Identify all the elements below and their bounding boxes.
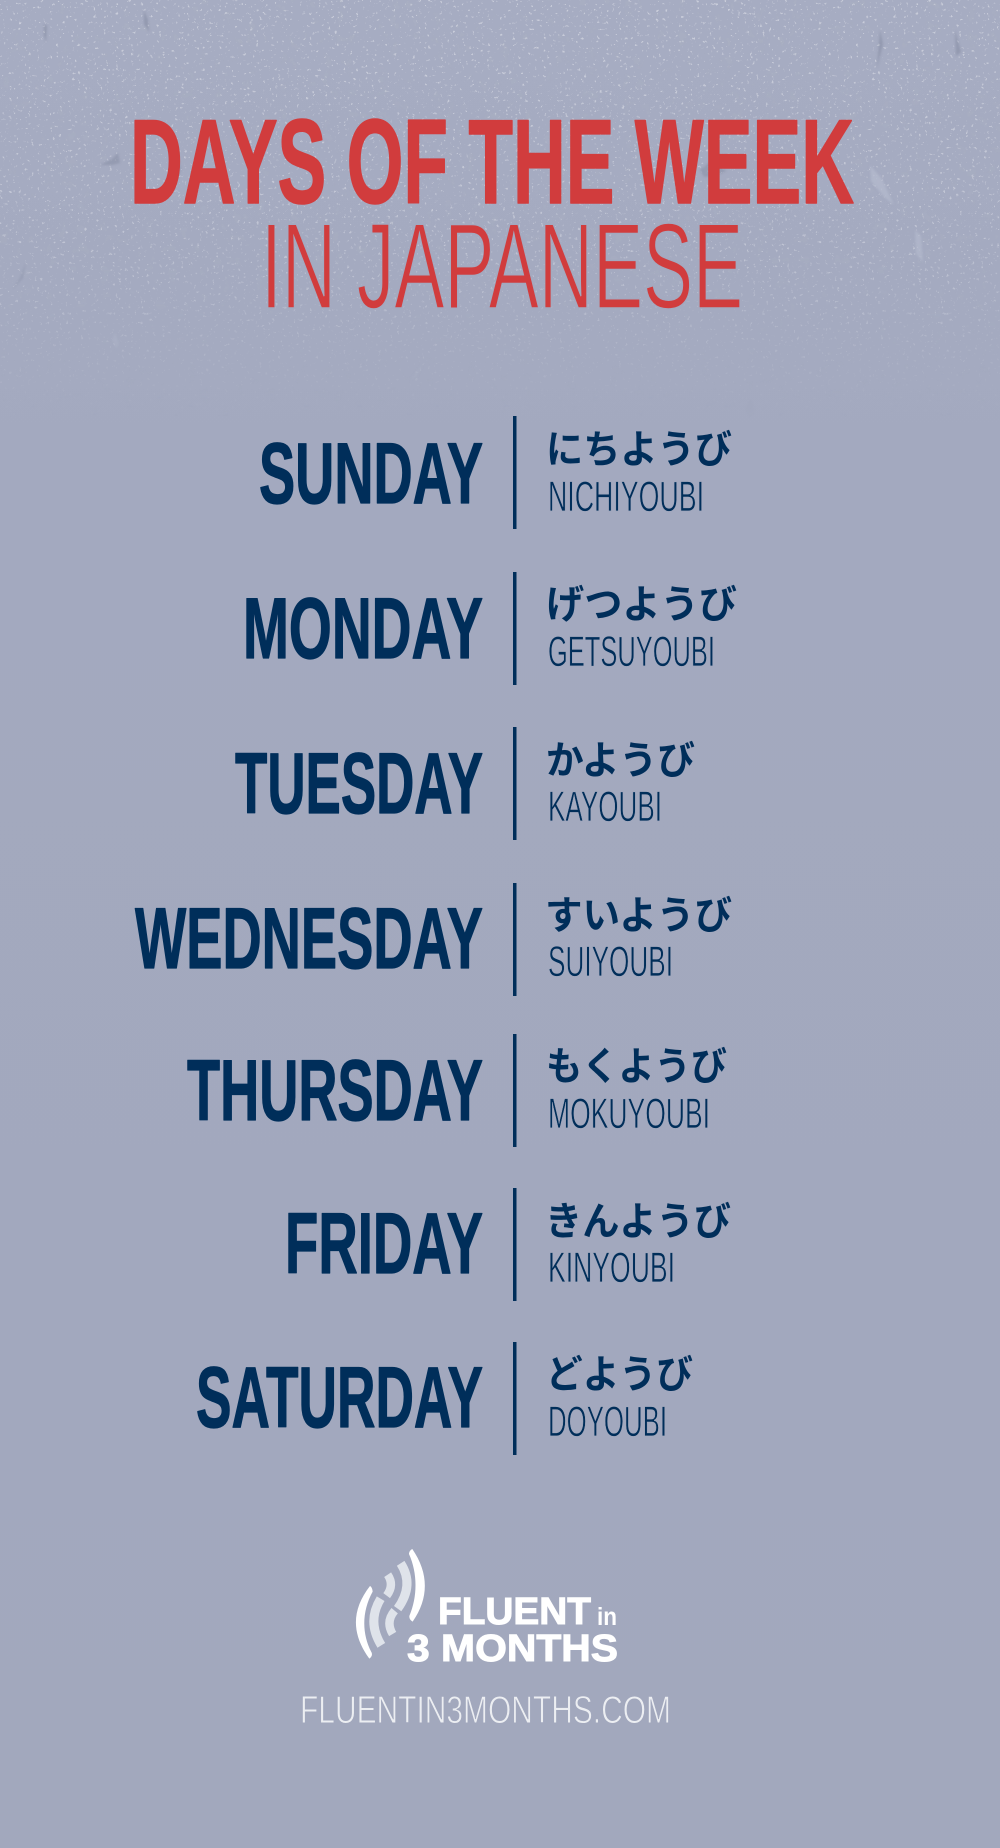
romaji: NICHIYOUBI — [548, 473, 704, 521]
hiragana: すいようび — [545, 895, 732, 938]
hiragana: どようび — [546, 1354, 693, 1397]
divider — [513, 727, 516, 840]
row: Monday — [243, 572, 737, 685]
row: Sunday — [259, 416, 732, 529]
divider — [513, 416, 516, 529]
divider — [513, 1034, 516, 1147]
romaji: KAYOUBI — [548, 783, 662, 831]
day name: SATURDAY — [196, 1350, 483, 1446]
background grain texture — [0, 0, 1000, 366]
row: Thursday — [187, 1034, 727, 1147]
romaji: KINYOUBI — [548, 1244, 675, 1292]
website url: FLUENTIN3MONTHS.COM — [300, 1689, 671, 1732]
day name: WEDNESDAY — [135, 891, 483, 987]
day name: SUNDAY — [259, 426, 483, 522]
day name: MONDAY — [243, 581, 483, 677]
row: Friday — [285, 1188, 731, 1301]
day name: THURSDAY — [187, 1043, 483, 1139]
divider — [513, 572, 516, 685]
divider — [513, 1188, 516, 1301]
hiragana: かようび — [546, 740, 695, 783]
row: Wednesday — [135, 883, 732, 996]
romaji: SUIYOUBI — [548, 938, 673, 986]
divider — [513, 883, 516, 996]
row: Saturday — [196, 1342, 693, 1455]
romaji: MOKUYOUBI — [548, 1090, 710, 1138]
hiragana: きんようび — [545, 1201, 731, 1244]
logo wordmark: FLUENT — [438, 1591, 591, 1633]
logo wordmark: 3 months: 3 MONTHS — [407, 1628, 618, 1670]
hiragana: にちようび — [546, 429, 732, 472]
row: Tuesday — [235, 727, 695, 840]
icon: sound waves — [356, 1549, 425, 1659]
day name: TUESDAY — [235, 736, 483, 832]
hiragana: げつようび — [546, 584, 737, 627]
logo wordmark: in: in — [597, 1603, 617, 1631]
hiragana: もくようび — [546, 1046, 727, 1089]
romaji: DOYOUBI — [548, 1398, 667, 1446]
romaji: GETSUYOUBI — [548, 628, 715, 676]
logo: Fluent in 3 Months — [356, 1549, 618, 1670]
day name: FRIDAY — [285, 1196, 483, 1292]
title — [130, 95, 854, 334]
divider — [513, 1342, 516, 1455]
